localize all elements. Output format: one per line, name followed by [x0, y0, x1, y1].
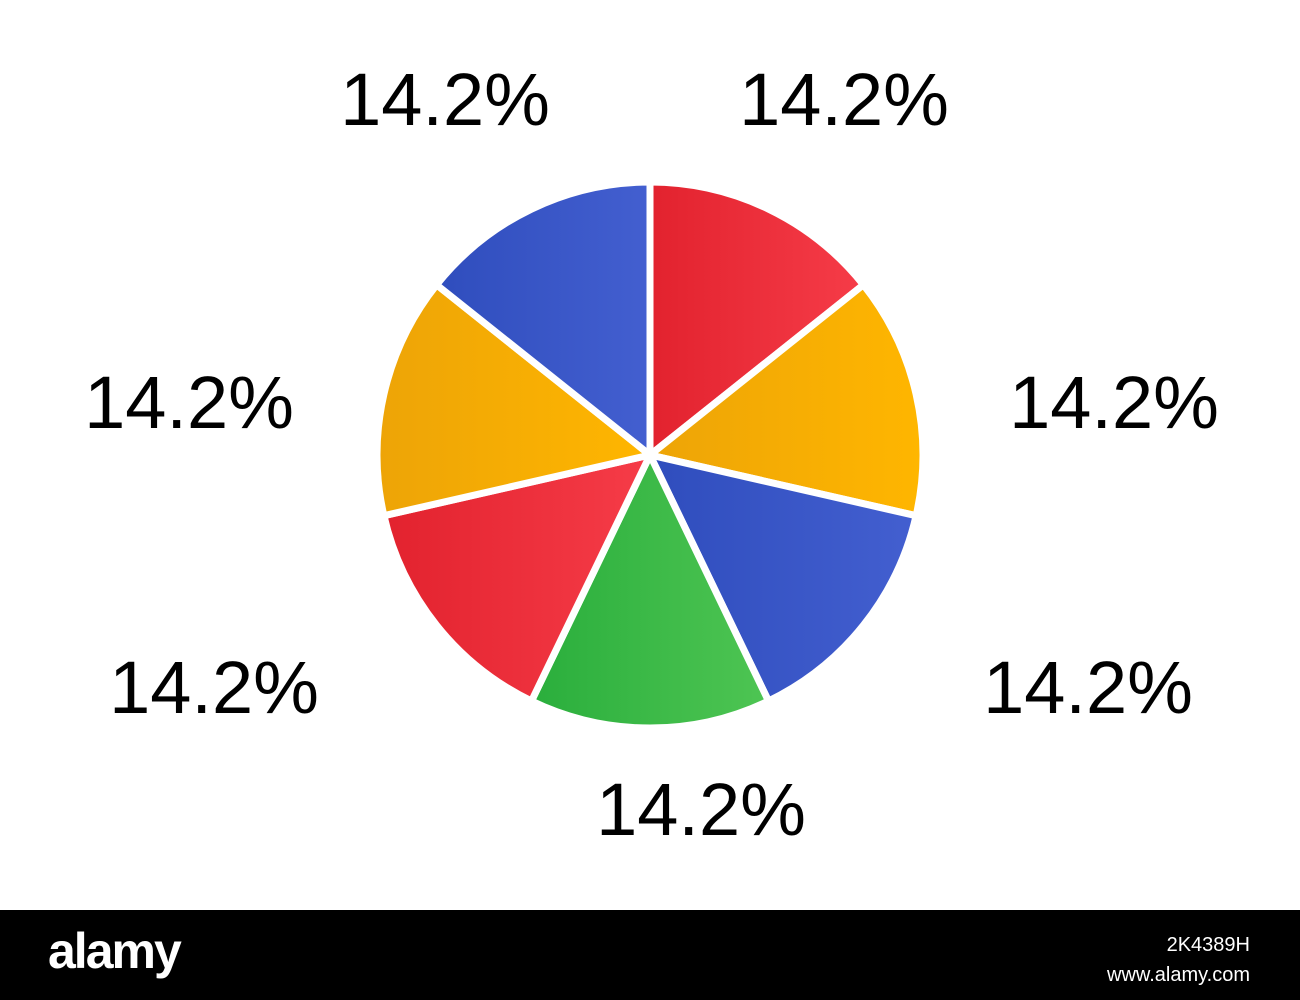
footer id: [1107, 934, 1250, 986]
label bottom: 14.2%: [596, 768, 806, 851]
slice: red top-right: [650, 182, 863, 455]
label bottom-right: 14.2%: [983, 646, 1193, 729]
slice: green bottom: [532, 455, 768, 728]
footer id: 2K4389H: [1167, 934, 1250, 956]
label left: 14.2%: [84, 361, 294, 444]
label bottom-left: 14.2%: [109, 646, 319, 729]
label top-left: 14.2%: [340, 58, 550, 141]
slice: yellow left: [377, 285, 650, 516]
slice: blue top-left: [437, 182, 650, 455]
footer id: www.alamy.com: [1107, 964, 1250, 986]
slice: yellow right: [650, 285, 923, 516]
slice: red bottom-left: [384, 455, 650, 701]
slice: blue bottom-right: [650, 455, 916, 701]
label top-right: 14.2%: [739, 58, 949, 141]
footer logo: alamy: [48, 923, 180, 979]
footer bar: [0, 910, 1300, 1000]
label right: 14.2%: [1009, 361, 1219, 444]
